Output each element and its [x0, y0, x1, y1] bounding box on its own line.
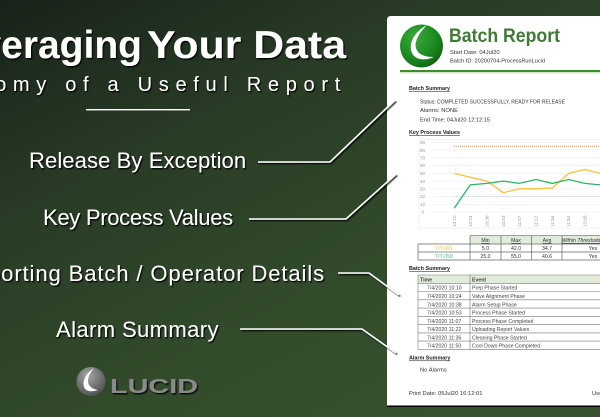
y axis labels: 30 [420, 186, 426, 192]
y axis labels: 10 [420, 202, 426, 207]
label: alarm summary: Alarm Summary [56, 317, 219, 342]
lucid logo [76, 367, 198, 398]
stats table: 40.6 [542, 254, 552, 260]
batch summary heading: Batch Summary [409, 266, 450, 272]
events table: 7/4/2020 10:53 [427, 310, 462, 316]
label: release by exception: Release By Exception [29, 148, 246, 173]
stats table: TIT-001 [435, 246, 453, 252]
stats table: TIT-058 [435, 254, 453, 260]
arrow: alarm summary [240, 329, 396, 353]
stats table: 42.0 [511, 246, 521, 252]
stats table: 55.0 [511, 254, 521, 260]
x axis labels [452, 215, 588, 227]
stats table: Yes [589, 246, 598, 252]
events table: Alarm Setup Phase [472, 302, 517, 308]
report meta: Start Date: 04Jul20 [450, 50, 500, 56]
stats table: Yes [589, 254, 598, 260]
x axis labels: 10:53 [501, 215, 506, 227]
arrow: key process values [249, 174, 396, 219]
x axis labels: 11:36 [550, 215, 555, 227]
x axis labels: 10:24 [468, 215, 473, 227]
x axis labels: 11:07 [517, 215, 522, 227]
x axis labels: 12:05 [582, 215, 588, 227]
alarm summary heading: Alarm Summary [409, 356, 450, 362]
stats table [418, 236, 600, 260]
events table: Prep Phase Started [472, 286, 517, 292]
events table: Cleaning Phase Started [472, 335, 527, 341]
x axis labels: 11:50 [566, 215, 571, 227]
label: key process values: Key Process Values [43, 205, 233, 230]
batch summary text: Batch Summary [409, 86, 450, 92]
batch summary text: Status: COMPLETED SUCCESSFULLY, READY FOR RELEASE [420, 100, 565, 106]
stats table: Avg [543, 238, 552, 244]
batch summary text: Alarms: NONE [420, 108, 458, 114]
y axis labels [420, 140, 426, 214]
y axis labels: 0 [422, 210, 424, 214]
stats table: 5.0 [482, 246, 489, 252]
alarm summary text: No Alarms [420, 368, 447, 374]
stats table: 25.0 [480, 254, 491, 260]
stats table: Within Threshold [562, 238, 600, 244]
events table: Process Phase Completed [472, 319, 534, 325]
stats table: Max [511, 238, 521, 244]
events table: 7/4/2020 11:22 [427, 327, 461, 333]
report title: Batch Report [449, 26, 561, 47]
report meta: Batch ID: 20200704-ProcessRunLucid [450, 58, 545, 64]
events table: 7/4/2020 11:36 [427, 335, 461, 341]
events table: 7/4/2020 11:50 [427, 344, 461, 350]
y axis labels: 40 [420, 179, 426, 184]
report meta [450, 50, 545, 64]
x axis labels: 11:22 [534, 215, 538, 227]
batch summary text: End Time: 04Jul20 12:12:15 [420, 118, 490, 124]
events table: Cool Down Phase Completed [472, 344, 540, 350]
title: Your Data [147, 24, 346, 67]
arrow: release by exception [258, 100, 395, 162]
lucid wordmark: LUCID [110, 376, 198, 398]
y axis labels: 70 [420, 156, 426, 160]
events table: 7/4/2020 11:07 [427, 319, 461, 325]
events table: 7/4/2020 10:38 [427, 302, 462, 308]
series: green [454, 180, 600, 208]
stats table: Min [481, 238, 490, 244]
upper limit line [454, 145, 600, 147]
events table: Time [420, 278, 432, 284]
lower limit line [454, 196, 600, 198]
events table: 7/4/2020 10:10 [427, 286, 462, 292]
x axis labels: 10:38 [484, 215, 490, 227]
icon: lucid sphere [76, 367, 106, 396]
stats table: 34.7 [542, 246, 552, 252]
report panel [387, 16, 600, 407]
events table: Uploading Report Values [472, 327, 530, 333]
title [0, 24, 346, 67]
arrow: batch details [338, 273, 399, 295]
events table: Valve Alignment Phase [472, 294, 525, 300]
icon: green logo [400, 24, 443, 68]
y axis labels: 80 [420, 148, 426, 153]
x axis labels: 10:10 [452, 215, 457, 227]
title underline [86, 109, 190, 110]
y axis labels: 90 [420, 140, 426, 145]
series: orange [454, 170, 600, 193]
line chart [419, 140, 600, 228]
print date footer: Print Date: 05Jul20 16:12:01 [409, 391, 482, 397]
events table [418, 275, 600, 350]
batch summary text [409, 86, 565, 124]
header rule [400, 70, 600, 74]
key process values heading: Key Process Values [409, 130, 460, 136]
events table: 7/4/2020 10:24 [427, 294, 462, 300]
y axis labels: 20 [420, 194, 426, 199]
y axis labels: 50 [420, 171, 426, 176]
events table: Event [472, 278, 486, 284]
events table: Process Phase Started [472, 310, 525, 316]
y axis labels: 60 [420, 163, 426, 168]
